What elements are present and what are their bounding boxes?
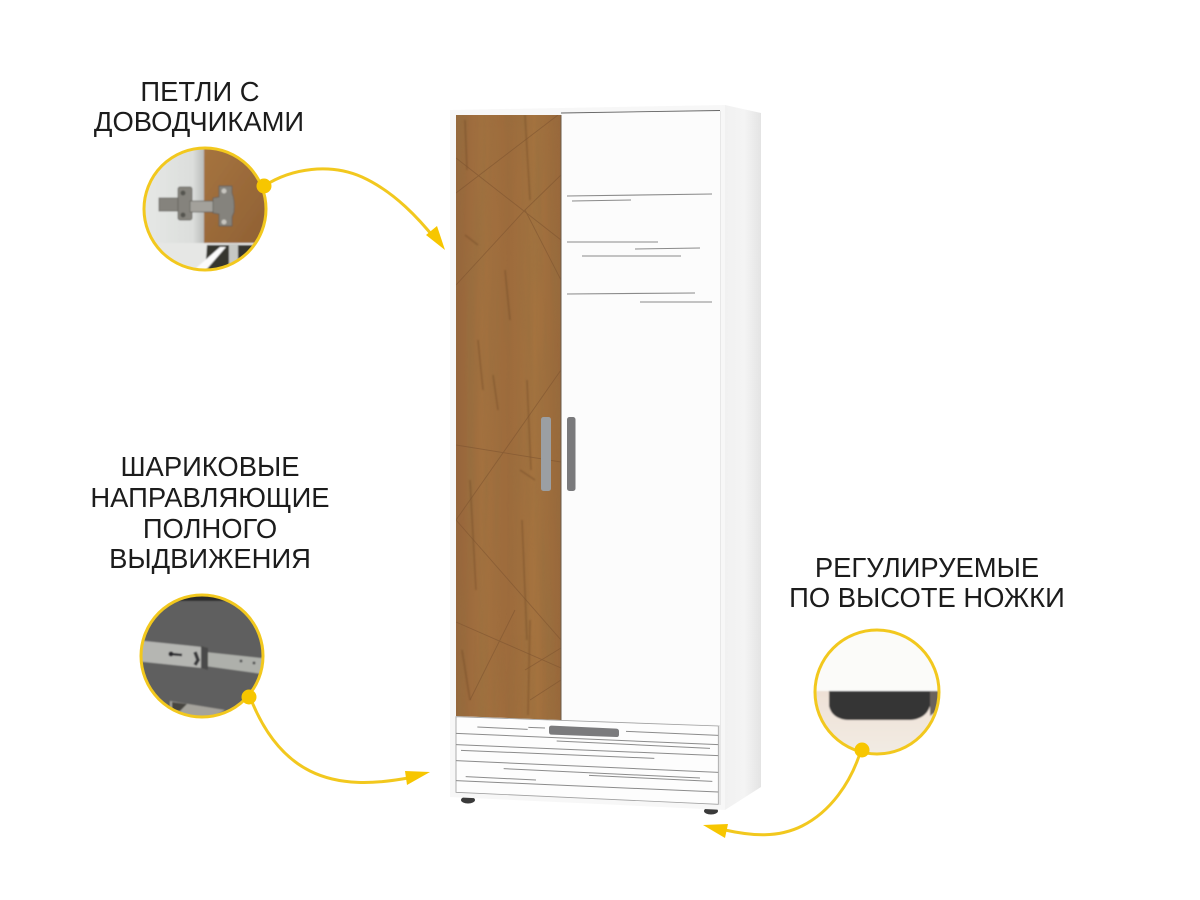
heading: adjustable legs: ПО ВЫСОТЕ НОЖКИ <box>789 582 1065 613</box>
wardrobe feet <box>461 796 718 814</box>
slide rail <box>135 640 202 668</box>
heading: ball-bearing slides <box>90 451 330 574</box>
heading: adjustable legs <box>789 552 1065 613</box>
wardrobe illustration <box>450 105 761 814</box>
heading: ball-bearing slides: ВЫДВИЖЕНИЯ <box>109 543 311 574</box>
heading: hinges: ПЕТЛИ С <box>140 76 260 107</box>
drawer handle <box>549 726 619 737</box>
detail circle: adjustable leg <box>810 626 944 758</box>
heading: adjustable legs: РЕГУЛИРУЕМЫЕ <box>815 552 1039 583</box>
detail circle: hinge <box>142 146 268 272</box>
heading: hinges: ДОВОДЧИКАМИ <box>94 106 304 137</box>
heading: hinges <box>94 76 304 137</box>
heading: ball-bearing slides: НАПРАВЛЯЮЩИЕ <box>90 482 330 513</box>
arrow: slide to drawer <box>242 690 430 785</box>
wardrobe side panel <box>725 105 761 810</box>
detail circle: drawer slide <box>140 594 264 718</box>
heading: ball-bearing slides: ШАРИКОВЫЕ <box>120 451 300 482</box>
right door engraved lines <box>567 194 712 302</box>
hinge plate <box>159 186 234 226</box>
wardrobe carcass front <box>450 105 725 810</box>
arrow: hinge to door <box>256 169 445 250</box>
right door: white <box>561 111 720 725</box>
drawer front <box>456 717 718 804</box>
heading: ball-bearing slides: ПОЛНОГО <box>143 513 277 544</box>
left door: wood <box>456 115 561 720</box>
arrow: leg detail to foot <box>703 742 870 838</box>
door handles <box>541 417 576 491</box>
drawer engraved lines <box>456 727 718 792</box>
